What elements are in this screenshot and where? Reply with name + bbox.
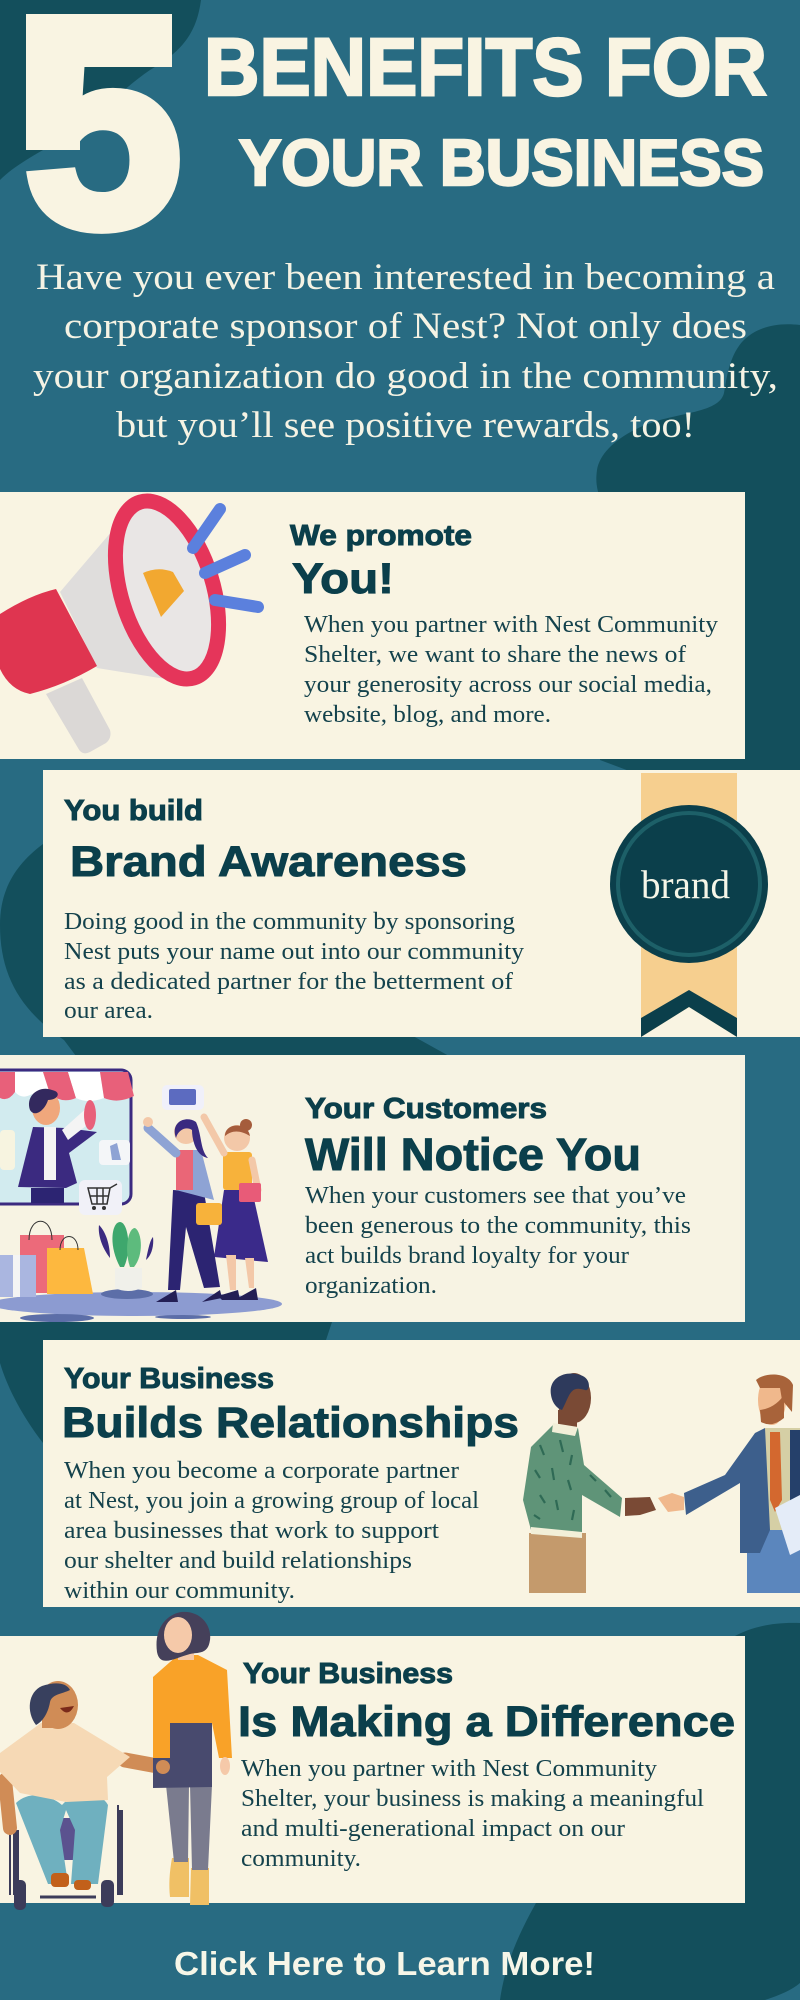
body text: Shelter, we want to share the news of bbox=[304, 642, 686, 668]
intro text: corporate sponsor of Nest? Not only does bbox=[64, 306, 747, 347]
body text bbox=[64, 909, 524, 1024]
illustration: standing woman bbox=[153, 1612, 232, 1905]
heading: Your Customers bbox=[305, 1093, 547, 1125]
heading: You build bbox=[64, 795, 203, 827]
intro text: your organization do good in the community, bbox=[33, 356, 778, 397]
body text: act builds brand loyalty for your bbox=[305, 1243, 629, 1269]
body text: as a dedicated partner for the betterment of bbox=[64, 969, 513, 995]
heading: Is Making a Difference bbox=[238, 1698, 735, 1746]
body text: When you partner with Nest Community bbox=[241, 1756, 657, 1782]
heading: Will Notice You bbox=[305, 1129, 641, 1180]
heading bbox=[62, 1363, 519, 1447]
illustration: handshake bbox=[523, 1373, 800, 1593]
body text: organization. bbox=[305, 1273, 437, 1299]
body text: our area. bbox=[64, 998, 153, 1024]
title: YOUR BUSINESS bbox=[239, 126, 764, 199]
body text: at Nest, you join a growing group of local bbox=[64, 1488, 479, 1514]
icon: megaphone bbox=[0, 489, 258, 753]
icon: brand ribbon badge bbox=[610, 773, 768, 1037]
illustration: storefront and shoppers bbox=[0, 1070, 282, 1322]
call to action: Click Here to Learn More! bbox=[174, 1945, 595, 1982]
body text bbox=[305, 1183, 691, 1299]
body text bbox=[304, 612, 718, 728]
heading: Your Business bbox=[64, 1363, 274, 1395]
body text: community. bbox=[241, 1846, 361, 1872]
heading: Builds Relationships bbox=[62, 1399, 519, 1447]
body text: website, blog, and more. bbox=[304, 702, 551, 728]
heading: You! bbox=[292, 555, 394, 603]
heading bbox=[290, 520, 472, 603]
body text: When you partner with Nest Community bbox=[304, 612, 718, 638]
body text: When your customers see that you’ve bbox=[305, 1183, 686, 1209]
heading bbox=[64, 795, 467, 886]
heading: Your Business bbox=[243, 1658, 453, 1690]
icon: brand ribbon badge: brand bbox=[641, 862, 730, 907]
body text bbox=[64, 1458, 479, 1604]
illustration: person in wheelchair bbox=[0, 1681, 163, 1910]
panel: builds relationships bbox=[43, 1340, 800, 1607]
body text: Doing good in the community by sponsoring bbox=[64, 909, 515, 935]
heading: We promote bbox=[290, 520, 472, 552]
body text: and multi-generational impact on our bbox=[241, 1816, 625, 1842]
panel: customers will notice you bbox=[0, 1055, 745, 1322]
title: BENEFITS FOR bbox=[204, 22, 767, 113]
body text bbox=[241, 1756, 704, 1872]
heading bbox=[305, 1093, 641, 1180]
body text: your generosity across our social media, bbox=[304, 672, 712, 698]
body text: within our community. bbox=[64, 1578, 295, 1604]
heading: Brand Awareness bbox=[70, 838, 467, 886]
body text: been generous to the community, this bbox=[305, 1213, 691, 1239]
body text: area businesses that work to support bbox=[64, 1518, 439, 1544]
body text: Shelter, your business is making a meaningful bbox=[241, 1786, 704, 1812]
panel: brand awareness bbox=[43, 770, 800, 1037]
title bbox=[204, 22, 767, 199]
heading bbox=[238, 1658, 735, 1746]
panel: making a difference bbox=[0, 1612, 745, 1910]
body text: Nest puts your name out into our community bbox=[64, 939, 524, 965]
intro text bbox=[33, 257, 778, 446]
body text: our shelter and build relationships bbox=[64, 1548, 412, 1574]
panel: we promote you bbox=[0, 489, 745, 759]
intro text: Have you ever been interested in becoming a bbox=[36, 257, 775, 298]
body text: When you become a corporate partner bbox=[64, 1458, 459, 1484]
intro text: but you’ll see positive rewards, too! bbox=[116, 405, 695, 446]
